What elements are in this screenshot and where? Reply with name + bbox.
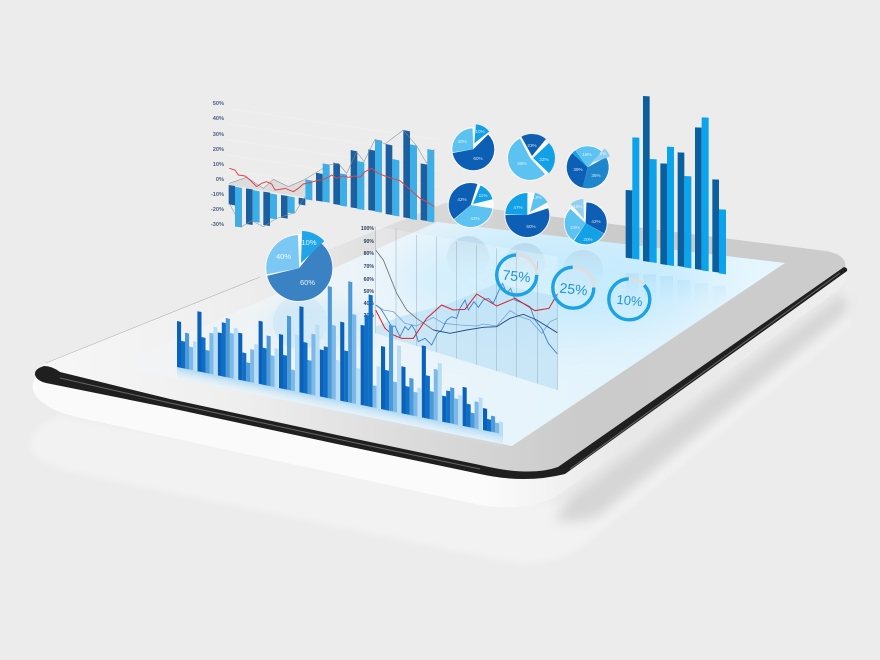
- back edge line: [46, 277, 260, 363]
- axis labels: 10%: [213, 162, 224, 168]
- line chart axis labels: 80%: [364, 251, 374, 257]
- black edge: [35, 267, 847, 479]
- bars and lines: [227, 108, 440, 227]
- axis labels: 40%: [213, 116, 224, 122]
- edge highlight: [60, 273, 840, 469]
- axis labels: 30%: [213, 132, 224, 138]
- pie: bottom row middle: 60%: [526, 224, 536, 229]
- line chart axis labels: 40%: [364, 301, 374, 307]
- pie: top row left: [451, 127, 495, 171]
- tablet: [33, 203, 847, 507]
- pie: bottom row middle: 47%: [513, 205, 523, 210]
- axis labels: -10%: [211, 192, 224, 198]
- large pie chart: 40%: [276, 252, 291, 261]
- line chart panel: [376, 227, 557, 390]
- foreground bar chart: [177, 246, 503, 448]
- pie: top row right: 39%: [573, 167, 583, 172]
- pie: top row middle: 22%: [539, 157, 549, 162]
- jagged blue line: [376, 283, 557, 354]
- axis labels: 20%: [213, 147, 224, 153]
- pie: top row middle: [507, 135, 553, 181]
- tablet shadow: [555, 290, 848, 522]
- pie: bottom row left: 43%: [470, 216, 480, 221]
- blue area: [376, 283, 557, 390]
- pie: top row middle: 23%: [527, 143, 537, 148]
- pie: top row right: 18%: [582, 152, 592, 157]
- screen glow: [265, 225, 710, 350]
- axis labels: 50%: [213, 101, 224, 107]
- pie: bottom row middle: 13%: [532, 195, 542, 200]
- ring: 75%: 75%: [502, 267, 531, 285]
- pie: bottom row middle: [504, 192, 550, 238]
- pie: bottom row right: 42%: [591, 219, 601, 224]
- line chart axis labels: 70%: [364, 264, 374, 270]
- pie: bottom row right: 23%: [570, 225, 580, 230]
- axis labels: 0%: [216, 177, 224, 183]
- tablet reflection: [31, 285, 850, 563]
- line chart axis labels: 90%: [364, 239, 374, 245]
- pie: top row left: 40%: [457, 139, 467, 144]
- ring: 25%: 25%: [559, 280, 588, 298]
- ring: 75%: [497, 255, 537, 295]
- glass panel: [376, 227, 557, 390]
- pie: top row middle: 55%: [517, 161, 527, 166]
- pie: top row left: 10%: [475, 129, 485, 134]
- pie: bottom row left: 42%: [457, 197, 467, 202]
- ring: 10%: [609, 279, 650, 320]
- large pie chart: 10%: [301, 238, 317, 247]
- navy trend line: [433, 314, 557, 333]
- bar reflection: [177, 367, 503, 448]
- pie: bottom row left: [448, 182, 494, 228]
- axis labels: [211, 101, 224, 228]
- pie: bottom row right: [564, 201, 608, 245]
- right bar chart: [626, 96, 726, 274]
- line chart axis labels: 100%: [361, 226, 374, 232]
- tablet bezel: [36, 203, 845, 474]
- axis labels: -20%: [211, 207, 224, 213]
- large pie chart: [265, 234, 333, 302]
- tablet screen: [115, 222, 785, 446]
- pie: top row right: 8%: [600, 151, 606, 156]
- line chart axis labels: 60%: [364, 277, 374, 283]
- ring: 25%: [553, 267, 594, 308]
- axis labels: -30%: [211, 222, 224, 228]
- line chart axis labels: 50%: [364, 289, 374, 295]
- back bar chart with percent axis: [211, 101, 440, 228]
- pie: bottom row right: 15%: [573, 204, 583, 209]
- tablet body edge: [33, 268, 847, 507]
- pie: bottom row right: 20%: [583, 237, 593, 242]
- pie: top row left: 60%: [473, 156, 483, 161]
- bar reflections under right chart: [626, 273, 726, 306]
- large pie chart: 60%: [300, 278, 315, 287]
- light blue line: [376, 305, 557, 333]
- pie reflections: [273, 236, 603, 349]
- line chart axis labels: 30%: [364, 313, 374, 319]
- bars: [177, 246, 503, 434]
- pie: top row right: 35%: [591, 173, 601, 178]
- pie: bottom row left: 11%: [479, 193, 487, 198]
- vertical lines: [376, 227, 557, 390]
- line chart axis labels: [361, 226, 374, 319]
- gray trend line: [376, 250, 433, 330]
- ring: 10%: 10%: [616, 292, 644, 309]
- pie: top row right: [566, 145, 610, 189]
- red line: [376, 294, 557, 338]
